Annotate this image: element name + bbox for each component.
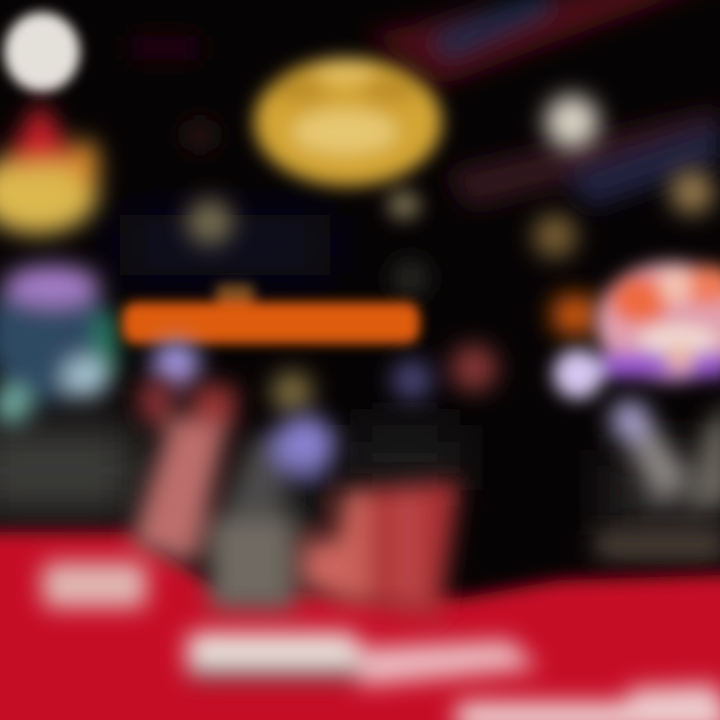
icon: red and yellow lantern: [0, 100, 99, 234]
bench on the right: [595, 530, 720, 560]
icon: purple and teal lantern: [0, 265, 116, 423]
ceiling beams: [130, 0, 720, 208]
icon: pink and purple striped lantern: [553, 262, 720, 399]
icon: white ball lantern: [4, 12, 80, 92]
grey chair shape at right: [610, 400, 720, 510]
red floor: [0, 532, 720, 720]
white stage platforms: [42, 562, 720, 720]
small glowing lights under banner: [152, 295, 598, 413]
icon: golden lantern: [254, 58, 442, 220]
chairs and figures in centre: [130, 380, 460, 620]
lower wall: [0, 425, 720, 535]
orange banner: [122, 284, 420, 344]
dark navy ceiling haze: [120, 215, 330, 275]
small ceiling lights: [184, 95, 714, 296]
